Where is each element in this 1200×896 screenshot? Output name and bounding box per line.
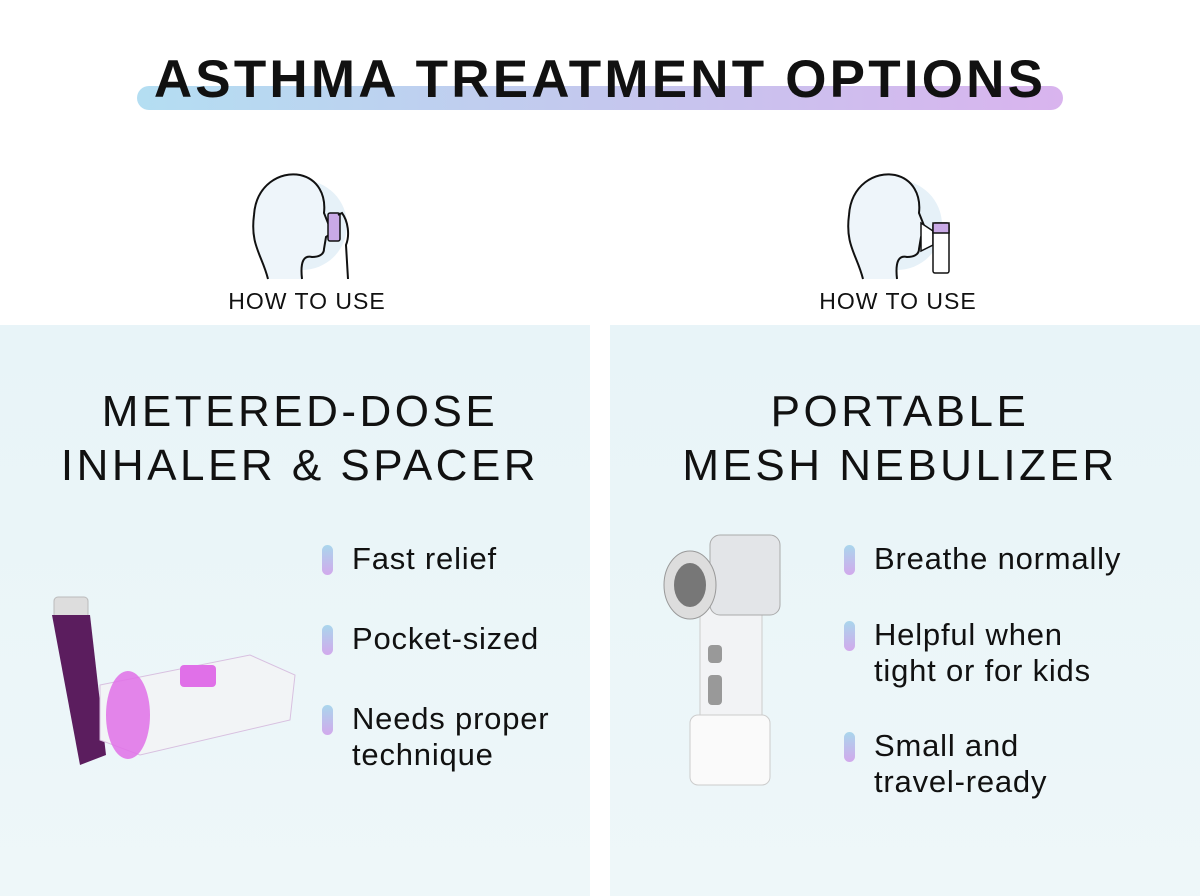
label: how to use left: HOW TO USE xyxy=(228,288,386,314)
bullet: helpful xyxy=(844,617,1091,688)
heading: PORTABLE xyxy=(771,387,1029,436)
bullet: helpful: tight or for kids xyxy=(874,653,1091,688)
image: nebulizer xyxy=(664,534,780,786)
bullet: pocket-sized: Pocket-sized xyxy=(352,621,539,656)
panel: inhaler & spacer xyxy=(0,325,590,896)
bullet: technique xyxy=(322,701,549,772)
heading xyxy=(682,387,1118,490)
bullet: technique: Needs proper xyxy=(352,701,549,736)
bullet list xyxy=(844,541,1121,799)
bullet: helpful: Helpful when xyxy=(874,617,1063,652)
bullet: fast relief: Fast relief xyxy=(352,541,497,576)
heading xyxy=(61,387,539,490)
panel: nebulizer xyxy=(610,325,1200,896)
icon: person using nebulizer xyxy=(847,173,950,280)
image: inhaler with spacer xyxy=(52,596,296,765)
title: ASTHMA TREATMENT OPTIONS xyxy=(154,50,1046,109)
heading: INHALER & SPACER xyxy=(61,441,539,490)
heading: MESH NEBULIZER xyxy=(682,441,1118,490)
label: how to use right: HOW TO USE xyxy=(819,288,977,314)
bullet: small xyxy=(844,728,1047,799)
bullet: small: Small and xyxy=(874,728,1019,763)
heading: METERED-DOSE xyxy=(102,387,498,436)
bullet: technique: technique xyxy=(352,737,494,772)
bullet: breathe normally: Breathe normally xyxy=(874,541,1121,576)
bullet: small: travel-ready xyxy=(874,764,1047,799)
bullet list xyxy=(322,541,549,772)
icon: person using inhaler xyxy=(252,173,350,280)
